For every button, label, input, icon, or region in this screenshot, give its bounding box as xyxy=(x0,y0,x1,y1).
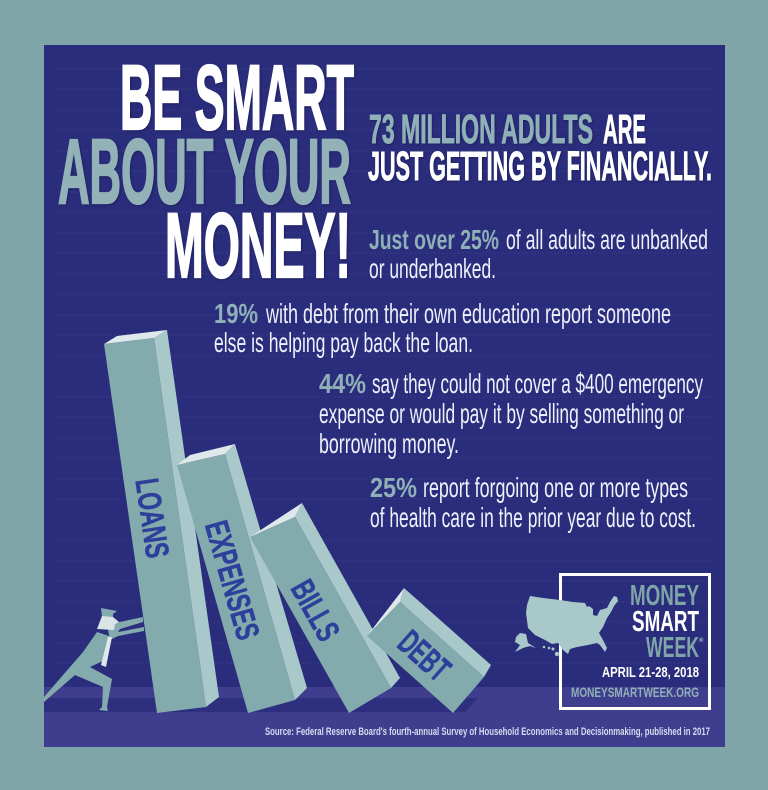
title xyxy=(58,47,354,297)
panel: navy background xyxy=(44,45,725,747)
stat: unbanked: or underbanked. xyxy=(369,253,496,284)
icon: map of the United States xyxy=(515,596,618,656)
block: debt: DEBT xyxy=(390,623,458,689)
block: bills: BILLS xyxy=(284,573,347,647)
floor band xyxy=(44,687,725,747)
block: bills xyxy=(250,503,400,713)
stat: education debt: else is helping pay back the loan. xyxy=(214,327,473,358)
stat: emergency expense xyxy=(319,368,703,459)
stat: health care xyxy=(370,472,696,533)
block: loans: LOANS xyxy=(128,476,177,560)
stat: 73 million adults: 73 MILLION ADULTS xyxy=(369,106,593,152)
block: expenses: EXPENSES xyxy=(198,516,267,644)
stat: education debt xyxy=(214,298,671,358)
logo wordmark: MONEY xyxy=(630,580,699,612)
infographic: BE SMART xyxy=(120,47,354,149)
infographic: ABOUT YOUR xyxy=(58,121,351,223)
logo wordmark: MONEYSMARTWEEK.ORG xyxy=(571,684,699,700)
title: MONEY! xyxy=(165,195,351,297)
stat: unbanked xyxy=(369,224,708,284)
stat: emergency expense: borrowing money. xyxy=(319,428,459,459)
logo wordmark xyxy=(571,580,704,700)
icon: man pushing blocks xyxy=(44,608,144,711)
logo box xyxy=(560,574,710,708)
stat: 73 million adults: ARE xyxy=(603,106,646,152)
logo wordmark: ® xyxy=(699,637,704,644)
block: expenses xyxy=(177,444,307,713)
logo wordmark: WEEK xyxy=(646,632,699,664)
block: debt xyxy=(367,588,491,713)
stat: health care: 25% xyxy=(370,472,417,503)
logo wordmark: APRIL 21-28, 2018 xyxy=(602,664,699,681)
stat: 73 million adults xyxy=(368,106,712,189)
stat: unbanked: Just over 25% xyxy=(369,224,499,255)
stat: education debt: 19% xyxy=(214,298,258,329)
logo wordmark: SMART xyxy=(632,606,699,638)
stat: emergency expense: 44% xyxy=(319,368,366,399)
block: loans xyxy=(104,330,219,713)
